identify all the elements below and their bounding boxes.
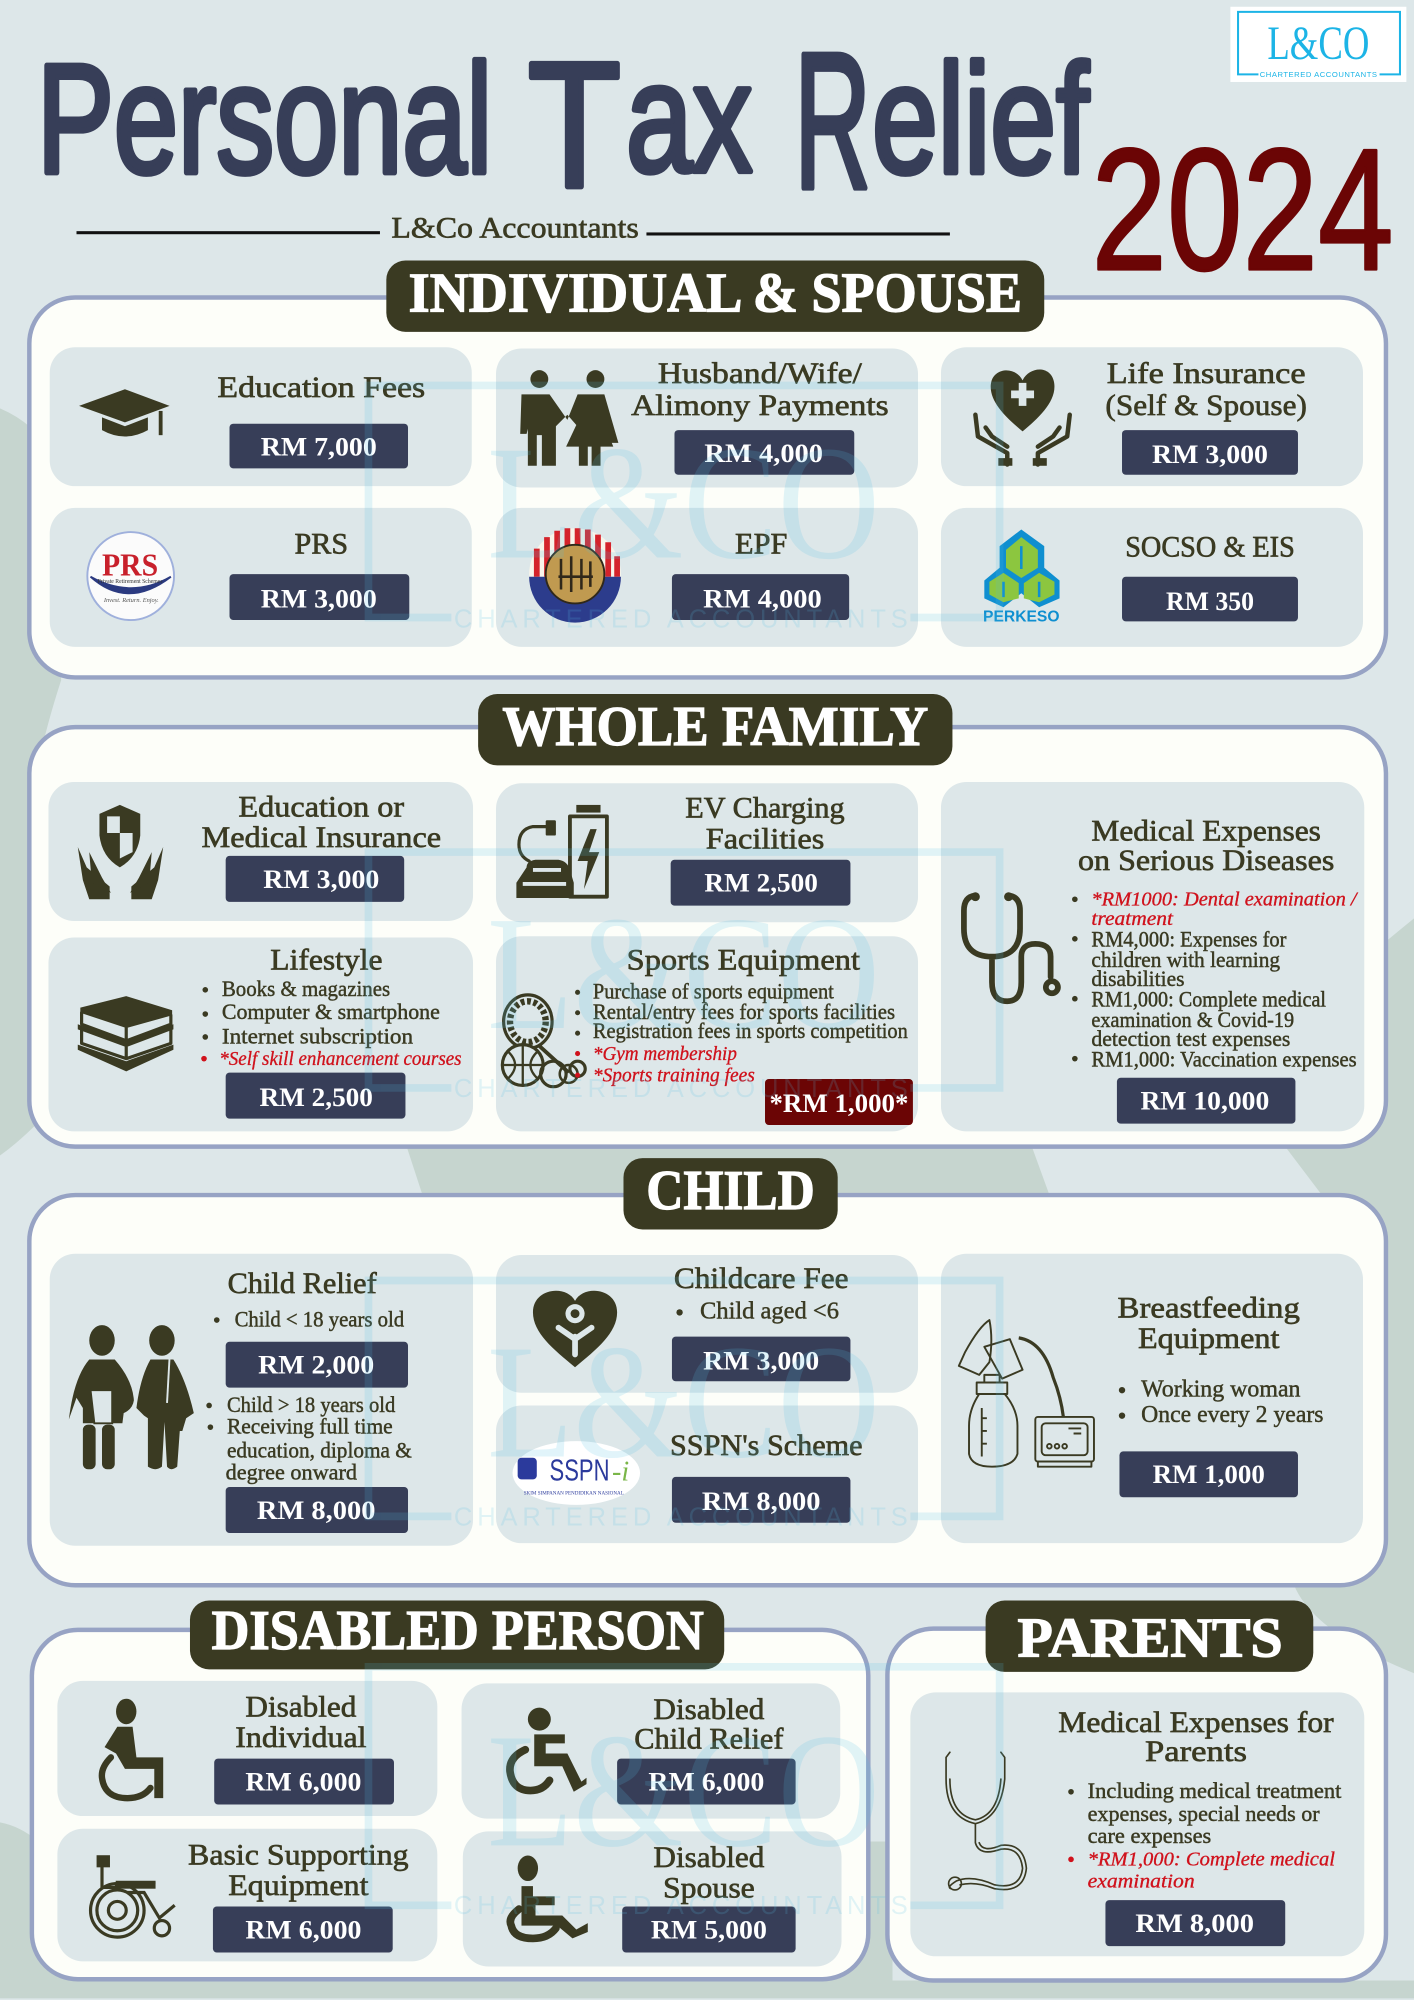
amount: [765, 1079, 913, 1125]
company logo: L&CO: [1267, 18, 1369, 70]
heading: [653, 1842, 765, 1905]
card: child relief: Child Relief: [228, 1268, 377, 1300]
icon: wheelchair symbol: [510, 1856, 588, 1938]
amount: [230, 424, 408, 468]
amount: RM 1,000: [1153, 1459, 1265, 1489]
bullet list: treatment: [1091, 908, 1174, 930]
card: PRS: PRS: [295, 529, 348, 561]
title: [37, 14, 1089, 230]
heading: [1118, 1292, 1300, 1355]
criteria: Working woman: [1141, 1376, 1301, 1403]
heading: Individual: [235, 1722, 367, 1754]
logo: PRS: Private Retirement Schemes: [98, 579, 163, 585]
heading: Equipment: [1138, 1323, 1279, 1355]
amount: RM 7,000: [261, 432, 377, 462]
bullet list: Registration fees in sports competition: [593, 1019, 908, 1043]
amount: RM 3,000: [263, 864, 379, 894]
bullet list: Including medical treatment: [1088, 1779, 1341, 1803]
card: PRS: [50, 508, 472, 647]
icon: books: [78, 996, 173, 1071]
panel: disabled person: [32, 1630, 868, 1979]
bullet list: Purchase of sports equipment: [593, 980, 834, 1004]
amount: [226, 1073, 405, 1119]
panel: individual and spouse: [29, 297, 1386, 677]
amount: RM 3,000: [703, 1346, 819, 1376]
card: education fees: [50, 347, 472, 486]
watermark 2: CHARTERED ACCOUNTANTS: [454, 1075, 908, 1103]
heading: parents: [986, 1601, 1313, 1672]
logo: SSPN-i: SSPN: [550, 1454, 609, 1488]
heading: [201, 791, 441, 854]
amount: RM 10,000: [1141, 1086, 1269, 1116]
heading: [634, 1694, 784, 1755]
heading: [631, 358, 889, 422]
subtitle with rules: L&Co Accountants: [391, 213, 639, 245]
card: EV charging: [496, 783, 918, 922]
watermark 3: [368, 1281, 1000, 1531]
card: education or medical insurance: [48, 782, 473, 921]
heading: Husband/Wife/: [658, 358, 863, 390]
amount: [1122, 577, 1298, 621]
card: education fees: Education Fees: [217, 372, 425, 404]
heading: on Serious Diseases: [1078, 845, 1334, 877]
card: life insurance: [941, 347, 1363, 486]
bullet list: care expenses: [1088, 1824, 1211, 1848]
watermark 4: L&CO: [487, 1701, 880, 1881]
title: R: [794, 14, 871, 230]
company logo: CHARTERED ACCOUNTANTS: [1260, 70, 1377, 79]
amount: RM 4,000: [704, 438, 823, 468]
icon: shield in hands: [78, 805, 163, 899]
heading: whole family: WHOLE FAMILY: [502, 696, 928, 758]
bullet list: children with learning: [1091, 948, 1280, 972]
icon: couple: [520, 370, 618, 466]
logo: SSPN-i: SKIM SIMPANAN PENDIDIKAN NASIONAL: [524, 1491, 624, 1497]
card: SOCSO and EIS: [941, 508, 1363, 647]
card: SSPN scheme: SSPN's Scheme: [670, 1430, 863, 1462]
icon: wheelchair symbol: [510, 1708, 587, 1792]
bullet list: Books & magazines: [222, 977, 390, 1001]
card: medical expenses for parents: [910, 1692, 1364, 1956]
amount: [1117, 1078, 1295, 1124]
icon: heart in hands: [975, 370, 1070, 466]
heading: Spouse: [663, 1873, 755, 1905]
icon: EV charger: [516, 805, 607, 898]
icon: stethoscope: [964, 892, 1061, 1001]
amount: [230, 574, 409, 620]
card: lifestyle: Lifestyle: [270, 944, 383, 976]
heading: Basic Supporting: [188, 1839, 409, 1871]
title: elief: [872, 32, 1089, 206]
heading: Equipment: [228, 1870, 368, 1902]
criteria: Once every 2 years: [1141, 1401, 1323, 1428]
heading: [1058, 1707, 1334, 1768]
logo: PERKESO: [983, 530, 1060, 625]
bullet list: Internet subscription: [222, 1024, 413, 1048]
heading: parents: PARENTS: [1017, 1608, 1283, 1670]
amount: RM 2,000: [258, 1350, 374, 1380]
heading: Disabled: [245, 1692, 357, 1724]
watermark 4: [368, 1667, 1000, 1920]
card: SOCSO and EIS: SOCSO & EIS: [1125, 531, 1295, 563]
watermark 3: L&CO: [487, 1312, 880, 1492]
heading: [1105, 358, 1307, 422]
amount: RM 6,000: [245, 1914, 361, 1944]
heading: Breastfeeding: [1118, 1292, 1300, 1324]
title: ax: [626, 30, 752, 204]
card: SSPN scheme: [496, 1405, 918, 1543]
criteria: over 18: [206, 1393, 412, 1484]
bullet list: RM1,000: Vaccination expenses: [1091, 1047, 1357, 1071]
amount: RM 2,500: [704, 868, 818, 898]
logo: EPF: [529, 528, 621, 623]
amount: RM 3,000: [1152, 439, 1268, 469]
logo: PRS: [87, 532, 174, 620]
amount: RM 3,000: [261, 583, 377, 613]
card: child relief: [50, 1254, 473, 1546]
logo: PRS: PRS: [102, 547, 158, 582]
card: disabled individual: [57, 1681, 437, 1816]
panel: whole family: [29, 727, 1386, 1147]
heading: Child Relief: [634, 1723, 784, 1755]
criteria: [1119, 1376, 1323, 1428]
amount: *RM 1,000*: [769, 1088, 908, 1118]
bullet list: [201, 977, 462, 1070]
amount: [226, 1487, 408, 1533]
logo: PERKESO: PERKESO: [983, 608, 1060, 625]
amount: [674, 430, 854, 475]
panel: child: [29, 1195, 1386, 1585]
watermark 3: CHARTERED ACCOUNTANTS: [454, 1503, 908, 1531]
bullet list: [575, 980, 908, 1087]
heading: individual and spouse: INDIVIDUAL & SPOUSE: [409, 262, 1022, 324]
amount: [214, 1759, 394, 1805]
amount: [226, 1342, 408, 1388]
panel: parents: [887, 1629, 1386, 1980]
amount: RM 6,000: [245, 1767, 361, 1797]
subtitle with rules: [77, 213, 950, 245]
company logo: [1230, 7, 1406, 82]
heading: Disabled: [653, 1694, 765, 1726]
logo: PRS: Invest. Return. Enjoy.: [103, 597, 159, 604]
icon: heart with child: [533, 1291, 617, 1367]
amount: [671, 860, 850, 906]
amount: RM 5,000: [651, 1914, 767, 1944]
heading: Disabled: [653, 1842, 765, 1874]
icon: parent and child figures: [69, 1325, 194, 1469]
amount: RM 4,000: [703, 583, 822, 613]
bullet list: *RM1,000: Complete medical: [1088, 1849, 1335, 1871]
amount: [672, 1337, 850, 1381]
criteria: over 18: degree onward: [226, 1460, 357, 1484]
heading: Education or: [238, 791, 404, 823]
card: basic supporting equipment: [57, 1829, 437, 1961]
heading: Parents: [1145, 1736, 1247, 1768]
watermark 2: L&CO: [487, 884, 880, 1064]
card: disabled spouse: [463, 1831, 842, 1966]
card: EPF: [496, 508, 918, 647]
bullet list: RM4,000: Expenses for: [1091, 927, 1287, 951]
title: T: [528, 25, 621, 225]
card: sports equipment: Sports Equipment: [627, 944, 860, 976]
icon: wheelchair: [91, 1857, 175, 1937]
heading: [1078, 816, 1334, 877]
criteria: Child aged <6: [700, 1298, 839, 1325]
criteria: under 18: Child < 18 years old: [235, 1307, 404, 1331]
logo: SSPN-i: [513, 1441, 640, 1505]
amount: RM 350: [1166, 586, 1254, 616]
amount: RM 8,000: [702, 1486, 820, 1516]
card: breastfeeding equipment: [941, 1254, 1363, 1543]
amount: RM 8,000: [1135, 1908, 1254, 1938]
card: lifestyle: [48, 938, 473, 1131]
bullet list: *Sports training fees: [593, 1065, 755, 1087]
amount: [1105, 1900, 1285, 1946]
bullet list: examination & Covid-19: [1091, 1008, 1294, 1032]
watermark 1: [368, 385, 1000, 634]
bullet list: disabilities: [1091, 967, 1184, 991]
card: disabled child relief: [462, 1683, 840, 1819]
card: EPF: EPF: [735, 529, 787, 561]
bullet list: [1068, 1779, 1341, 1892]
amount: [622, 1907, 796, 1952]
bullet list: *Self skill enhancement courses: [219, 1048, 462, 1070]
heading: child: CHILD: [646, 1160, 815, 1222]
title: Personal: [37, 32, 492, 206]
icon: stethoscope outline: [946, 1752, 1026, 1890]
amount: RM 8,000: [257, 1495, 375, 1525]
heading: disabled person: DISABLED PERSON: [212, 1600, 704, 1662]
bullet list: [1072, 889, 1359, 1071]
watermark 2: [368, 852, 1000, 1103]
card: medical expenses on serious diseases: [941, 782, 1364, 1131]
heading: (Self & Spouse): [1105, 390, 1307, 422]
watermark 1: CHARTERED ACCOUNTANTS: [454, 606, 908, 634]
heading: EV Charging: [685, 793, 845, 825]
icon: graduation cap: [79, 389, 170, 436]
bullet list: *RM1000: Dental examination /: [1091, 889, 1359, 911]
amount: [617, 1759, 796, 1805]
heading: [685, 793, 845, 855]
heading: Facilities: [706, 823, 824, 855]
amount: RM 2,500: [259, 1082, 373, 1112]
heading: Medical Insurance: [201, 822, 441, 854]
bullet list: detection test expenses: [1091, 1027, 1290, 1051]
heading: Medical Expenses for: [1058, 1707, 1334, 1739]
logo: SSPN-i: -i: [612, 1457, 629, 1488]
amount: RM 6,000: [648, 1767, 764, 1797]
icon: breast pump: [959, 1320, 1094, 1467]
bullet list: expenses, special needs or: [1088, 1802, 1320, 1826]
heading: Alimony Payments: [631, 390, 889, 422]
watermark 4: CHARTERED ACCOUNTANTS: [454, 1892, 908, 1920]
card: childcare fee: [496, 1255, 918, 1393]
bullet list: examination: [1088, 1870, 1195, 1892]
icon: sports equipment: [502, 995, 585, 1087]
bullet list: Rental/entry fees for sports facilities: [593, 1000, 895, 1024]
bullet list: Computer & smartphone: [222, 1000, 440, 1024]
amount: [1119, 1451, 1298, 1497]
amount: [672, 574, 849, 620]
heading: [235, 1692, 367, 1754]
amount: [226, 856, 404, 902]
card: childcare fee: Childcare Fee: [674, 1263, 849, 1295]
bullet list: *Gym membership: [593, 1043, 737, 1065]
bullet list: RM1,000: Complete medical: [1091, 987, 1326, 1011]
icon: wheelchair user: [102, 1699, 163, 1798]
card: husband wife alimony: [496, 348, 918, 487]
watermark 1: L&CO: [487, 414, 880, 594]
heading: [188, 1839, 409, 1902]
criteria: over 18: Child > 18 years old: [227, 1393, 395, 1417]
criteria: over 18: education, diploma &: [227, 1439, 412, 1463]
amount: [672, 1477, 850, 1523]
amount: [213, 1907, 393, 1952]
heading: Life Insurance: [1107, 358, 1306, 390]
card: sports equipment: [496, 936, 918, 1131]
heading: Medical Expenses: [1091, 816, 1321, 848]
amount: [1122, 430, 1298, 475]
criteria: over 18: Receiving full time: [227, 1415, 393, 1439]
